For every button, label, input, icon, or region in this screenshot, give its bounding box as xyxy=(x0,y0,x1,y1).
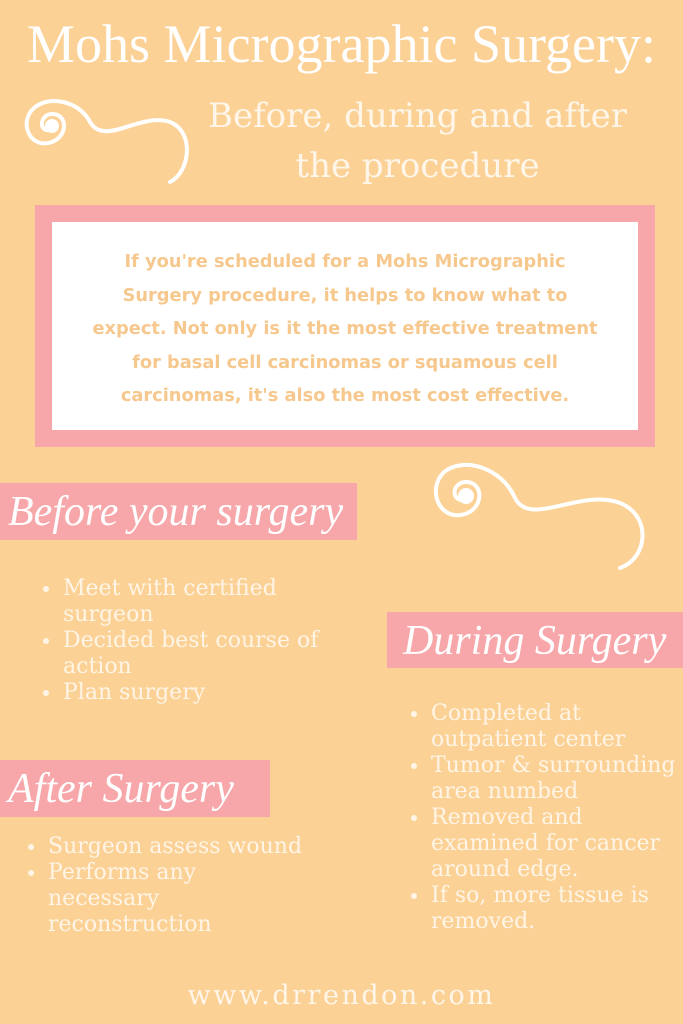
subtitle: the procedure xyxy=(295,146,540,186)
intro text: If you're scheduled for a Mohs Micrographic xyxy=(124,251,566,272)
list: after: reconstruction xyxy=(48,912,212,937)
intro text: for basal cell carcinomas or squamous cell xyxy=(132,352,558,372)
heading: after: After Surgery xyxy=(8,766,234,812)
list: during: If so, more tissue is xyxy=(431,883,649,908)
footer url: www.drrendon.com xyxy=(188,980,495,1011)
list: during: outpatient center xyxy=(431,727,625,752)
list: during: Removed and xyxy=(431,805,583,830)
list: before: action xyxy=(63,654,132,679)
icon: swirl top xyxy=(24,99,189,184)
intro panel xyxy=(35,205,655,447)
list: during: Completed at xyxy=(431,701,581,726)
list: after: necessary xyxy=(48,886,159,911)
list: after: Performs any xyxy=(48,860,196,885)
intro text: carcinomas, it's also the most cost effective. xyxy=(121,385,569,406)
intro text: Surgery procedure, it helps to know what to xyxy=(123,284,567,306)
list: before: Decided best course of xyxy=(63,628,318,653)
intro text: expect. Not only is it the most effective treatment xyxy=(92,318,598,339)
list: before: Plan surgery xyxy=(63,680,205,705)
list: before: Meet with certified xyxy=(63,576,277,601)
list: during: around edge. xyxy=(431,857,578,882)
list: after xyxy=(28,834,302,937)
icon: swirl middle xyxy=(434,462,644,570)
list: during xyxy=(411,701,675,934)
heading: during: During Surgery xyxy=(403,618,666,664)
heading: before: Before your surgery xyxy=(8,489,343,535)
intro text xyxy=(52,222,638,430)
list: during: area numbed xyxy=(431,779,578,804)
heading: after xyxy=(0,760,270,817)
title: Mohs Micrographic Surgery: xyxy=(27,14,656,74)
list: during: examined for cancer xyxy=(431,831,660,856)
subtitle: Before, during and after xyxy=(208,96,627,136)
list: during: removed. xyxy=(431,909,535,934)
list: during: Tumor & surrounding xyxy=(431,753,675,778)
list: after: Surgeon assess wound xyxy=(48,834,302,859)
list: before: surgeon xyxy=(63,602,154,627)
list: before xyxy=(43,576,320,705)
subtitle xyxy=(208,96,627,186)
